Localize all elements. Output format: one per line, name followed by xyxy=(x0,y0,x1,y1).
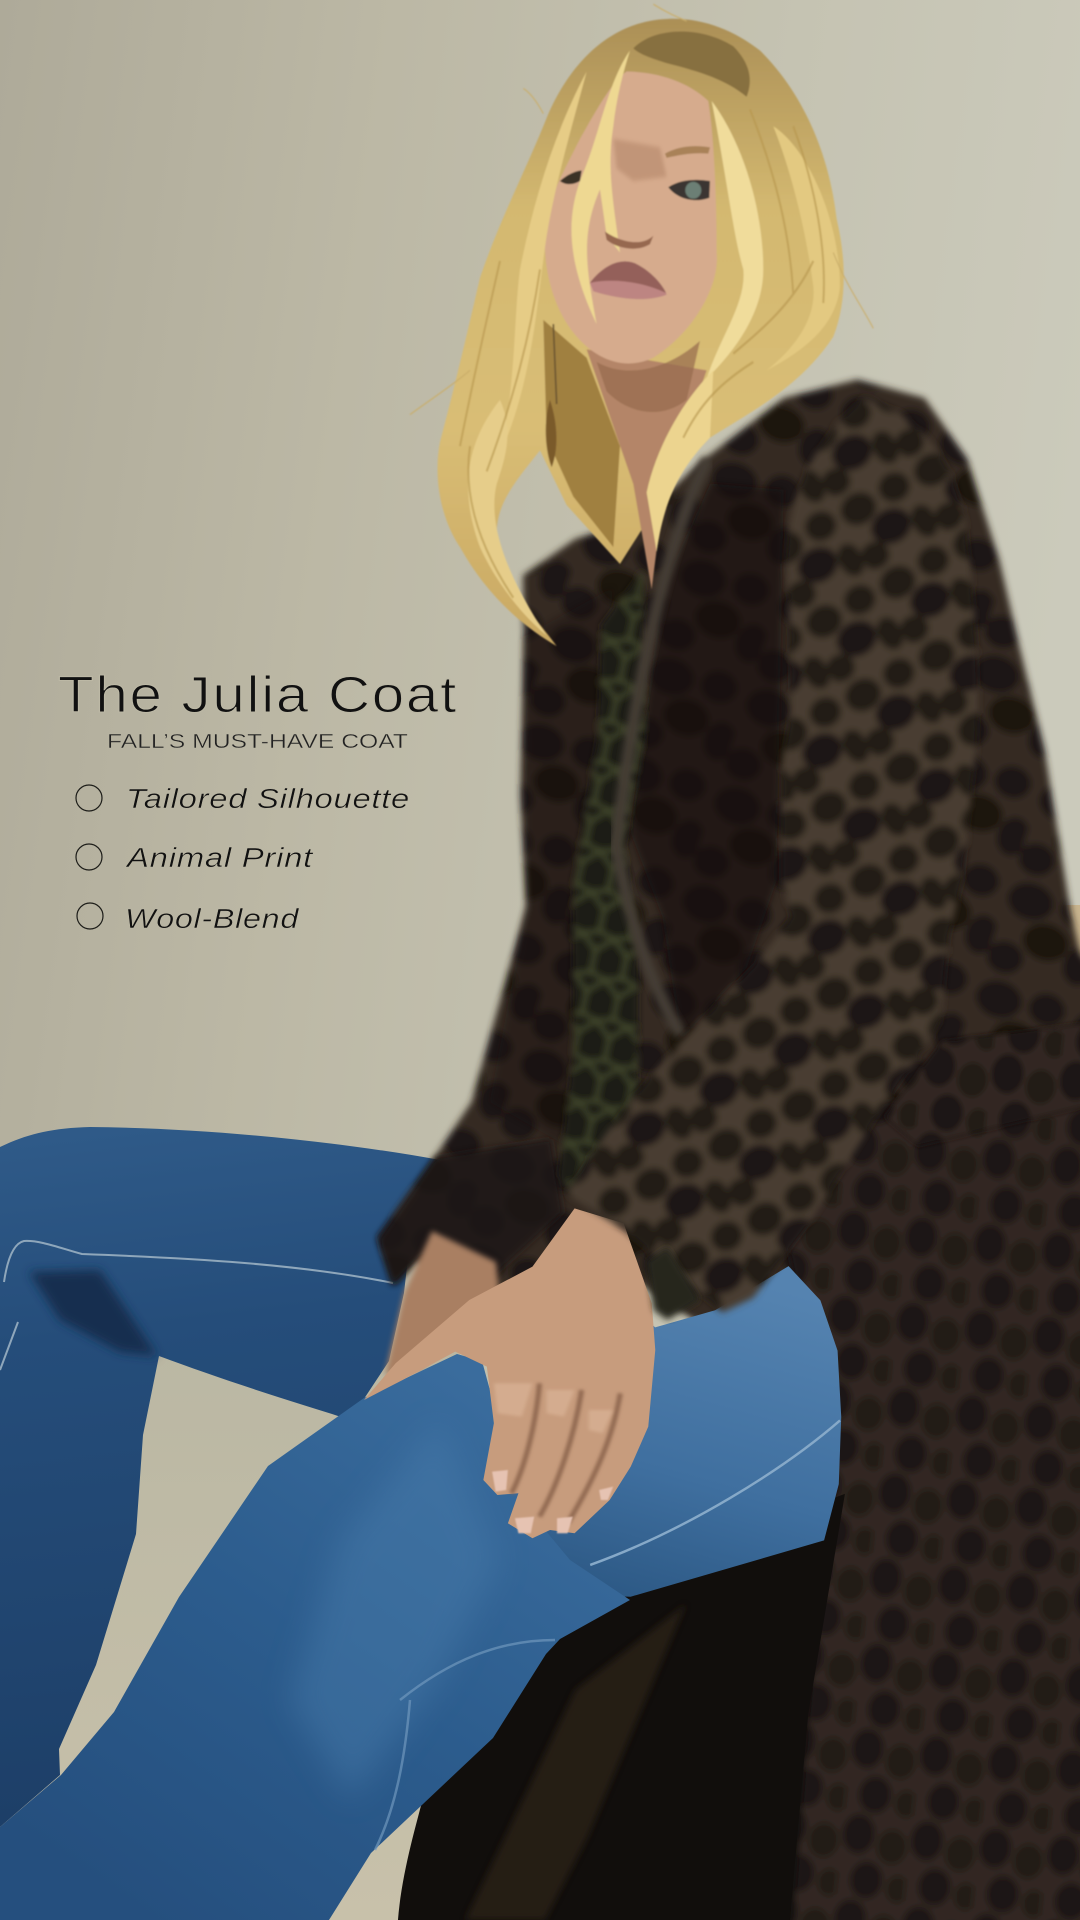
title: The Julia Coat xyxy=(58,666,458,723)
nose shadow xyxy=(605,231,653,249)
earring xyxy=(546,324,557,467)
hand xyxy=(364,1208,655,1538)
right sleeve and cuff xyxy=(566,398,1080,1320)
fingernails xyxy=(492,1470,613,1533)
jeans: waist seam xyxy=(0,1241,393,1370)
hair: left highlights xyxy=(500,72,587,455)
sleeve xyxy=(566,398,978,1313)
lips xyxy=(590,261,667,299)
coat main body and lining xyxy=(377,380,1080,1920)
face xyxy=(545,72,717,363)
finger separations xyxy=(511,1383,620,1523)
iris xyxy=(685,182,701,199)
coat: lapel edge xyxy=(616,459,708,1035)
hair: fine strands xyxy=(460,109,824,598)
scarf xyxy=(558,569,645,1194)
jeans: knee fold shadow xyxy=(29,1270,157,1356)
feature: Wool-Blend xyxy=(77,903,300,934)
coat: dark front panel xyxy=(631,484,784,1041)
knuckle highlights xyxy=(494,1383,613,1433)
scarf at cuff xyxy=(647,1247,700,1320)
feature: Tailored Silhouette: Tailored Silhouette xyxy=(126,783,410,814)
upper lip shadow xyxy=(590,261,666,293)
hair: front strand xyxy=(571,51,630,324)
jeans: knee crease xyxy=(375,1640,555,1850)
jeans: back leg xyxy=(0,1127,440,1827)
coat: dark underlay xyxy=(759,1469,857,1920)
feature: Animal Print: Animal Print xyxy=(125,842,314,873)
jeans: thigh seam xyxy=(590,1420,840,1565)
coat: black lining skirt xyxy=(398,1494,845,1920)
hair: inner shadow left of neck xyxy=(543,320,620,547)
eyebrow xyxy=(665,146,710,158)
feature: Animal Print xyxy=(76,842,314,873)
left forearm xyxy=(385,1231,500,1375)
neck shadow xyxy=(597,341,700,412)
eye socket shadow xyxy=(613,139,667,181)
feature list xyxy=(76,783,410,934)
subtitle: FALL’S MUST-HAVE COAT xyxy=(107,730,409,753)
hair: back mass xyxy=(437,19,844,646)
pocket flap xyxy=(884,1021,1080,1146)
feature: Wool-Blend: Wool-Blend xyxy=(125,903,300,934)
head and hair xyxy=(410,4,873,646)
lower wall tones xyxy=(0,905,1080,1920)
hair: lower right strand xyxy=(647,370,713,551)
hair: right lights xyxy=(767,126,840,370)
coat: main body xyxy=(377,380,1080,1347)
hair: root shading xyxy=(633,32,750,97)
left eye xyxy=(560,170,582,184)
right eye xyxy=(668,180,710,200)
neck xyxy=(587,349,707,589)
coat: left panel shadow xyxy=(490,588,612,1151)
hair: flyaway strands xyxy=(410,4,873,415)
jeans: thigh xyxy=(490,1266,841,1597)
hair: right highlights xyxy=(707,101,763,379)
jeans: front shin xyxy=(0,1354,630,1920)
hand outline xyxy=(364,1208,655,1538)
hair: lower left lights xyxy=(468,400,547,636)
jeans: shin highlight xyxy=(290,1420,500,1800)
coat: lining fold xyxy=(465,1604,686,1920)
coat: lower panel xyxy=(784,1078,1080,1920)
coat: cuff shadow xyxy=(378,1139,563,1286)
